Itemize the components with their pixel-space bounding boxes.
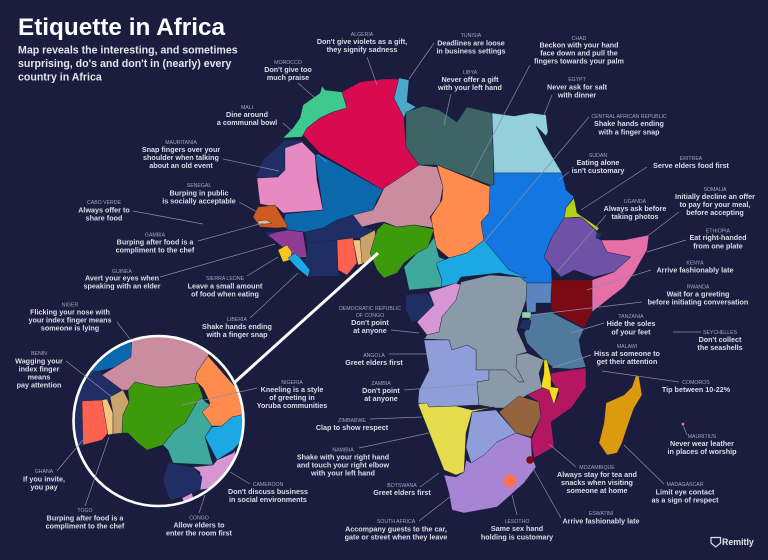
label: Benin: Wagging your: [15, 356, 63, 366]
label: Eswatini: [562, 511, 640, 526]
label: Benin: [15, 351, 63, 390]
label: Tunisia: in business settings: [436, 46, 506, 56]
title: Etiquette in Africa: [18, 14, 225, 41]
label: Togo: [46, 508, 125, 530]
country: Chad: [431, 165, 491, 258]
label: Mozambique: [557, 465, 637, 495]
label: Ghana: If you invite,: [23, 474, 65, 484]
label: Niger: your index finger means: [28, 316, 112, 324]
label: Seychelles: Don't collect: [699, 335, 742, 344]
inset: Congo: [193, 450, 235, 490]
label: Kenya: Arrive fashionably late: [656, 266, 734, 274]
country: Libya: [406, 106, 494, 185]
label: Mali: [217, 105, 277, 127]
label: Somalia: before accepting: [686, 208, 744, 217]
label: Liberia: LIBERIA: [227, 317, 247, 323]
inset: Togo: [102, 399, 113, 435]
label: Rwanda: Wait for a greeting: [667, 290, 729, 298]
label: Morocco: MOROCCO: [274, 60, 302, 66]
label: Ethiopia: [689, 228, 747, 250]
label: Kenya: [656, 260, 734, 274]
inset: Niger: [102, 335, 215, 390]
country: Madagascar: [599, 375, 642, 455]
label: Chad: CHAD: [572, 36, 587, 42]
label: Madagascar: as a sign of respect: [651, 496, 719, 504]
label: Namibia: with your left hand: [310, 468, 375, 478]
label: Nigeria: [257, 380, 327, 410]
country: Egypt: [492, 113, 562, 173]
label: Madagascar: Limit eye contact: [656, 488, 715, 496]
label: Angola: Greet elders first: [345, 358, 403, 367]
label: Eritrea: [653, 156, 730, 170]
country: Guinea: [268, 230, 307, 258]
label: Chad: fingers towards your palm: [534, 56, 624, 66]
label: Guinea: Avert your eyes when: [85, 274, 159, 282]
label: Democratic Republic of Congo: [339, 306, 401, 335]
label: Comoros: [662, 380, 731, 394]
label: Egypt: [547, 77, 608, 100]
label: Mauritania: [142, 140, 220, 170]
label: Tunisia: Deadlines are loose: [437, 38, 505, 48]
label: Nigeria: NIGERIA: [281, 380, 303, 386]
label: Central African Republic: CENTRAL AFRICAN REPUBLIC: [591, 114, 667, 120]
inset: Benin: [110, 390, 129, 434]
label: Angola: ANGOLA: [363, 353, 385, 359]
label: Mauritius: MAURITIUS: [688, 434, 717, 440]
label: Central African Republic: Shake hands ending: [594, 119, 664, 128]
label: Algeria: ALGERIA: [351, 32, 374, 38]
country: Burundi: [519, 320, 531, 330]
label: Botswana: Greet elders first: [373, 488, 431, 497]
leader lines: [57, 43, 701, 521]
country: Ethiopia: [544, 217, 631, 277]
label: Mauritius: Never wear leather: [670, 439, 734, 448]
label: Seychelles: SEYCHELLES: [703, 330, 738, 336]
country: Togo: [353, 240, 365, 265]
country: Zimbabwe: [499, 396, 541, 437]
label: Comoros: Tip between 10-22%: [662, 385, 731, 394]
label: Libya: with your left hand: [437, 83, 502, 92]
label: Zimbabwe: Clap to show respect: [316, 423, 389, 432]
label: Chad: face down and pull the: [540, 48, 618, 58]
country: Lake Victoria: [536, 303, 551, 320]
label: Eritrea: ERITREA: [680, 156, 703, 162]
label: Mauritius: [667, 434, 737, 456]
label: Morocco: [264, 60, 312, 82]
subtitle: [18, 44, 238, 84]
label: Somalia: [675, 187, 755, 217]
country: Namibia: [418, 403, 494, 475]
label: Gambia: compliment to the chef: [116, 246, 195, 254]
label: Madagascar: MADAGASCAR: [667, 482, 704, 488]
country: Cameroon: [404, 237, 446, 290]
label: Tanzania: of your feet: [611, 328, 651, 336]
label: Seychelles: [697, 330, 743, 352]
country: Eswatini: [526, 456, 534, 464]
label: Cabo Verde: Always offer to: [78, 206, 130, 214]
label: Togo: compliment to the chef: [46, 522, 125, 530]
label: Tanzania: Hide the soles: [607, 319, 655, 328]
label: Democratic Republic of Congo: Don't point: [351, 318, 389, 327]
label: Senegal: Burping in public: [169, 188, 229, 198]
label: Egypt: EGYPT: [568, 77, 587, 83]
label: Ethiopia: from one plate: [693, 242, 743, 250]
label: Congo: CONGO: [189, 516, 209, 522]
label: Ethiopia: Eat right-handed: [689, 233, 747, 242]
label: Nigeria: Yoruba communities: [257, 401, 327, 410]
country: Ivory Coast: [302, 240, 340, 277]
label: Togo: Burping after food is a: [47, 514, 124, 522]
label: Gambia: [116, 232, 195, 254]
label: South Africa: Accompany guests to the car,: [345, 524, 447, 534]
label: Tanzania: [607, 314, 655, 336]
country: Eritrea: [564, 198, 599, 231]
label: Botswana: BOTSWANA: [387, 483, 417, 489]
label: Guinea: [83, 269, 161, 290]
label: Liberia: with a finger snap: [205, 330, 268, 339]
label: Niger: NIGER: [62, 302, 78, 308]
label: Congo: Allow elders to: [173, 520, 225, 530]
country: Malawi: [541, 360, 559, 405]
country: Tanzania: [524, 312, 586, 369]
inset: Ghana: [82, 400, 108, 445]
country: Liberia: [288, 253, 310, 277]
label: Mauritania: MAURITANIA: [165, 140, 197, 146]
label: Kenya: KENYA: [686, 260, 704, 266]
label: Malawi: MALAWI: [617, 344, 637, 350]
subtitle: country in Africa: [18, 72, 102, 84]
label: Zambia: [362, 381, 400, 403]
inset: Gabon: [163, 463, 202, 500]
label: Gambia: Burping after food is a: [117, 238, 194, 246]
label: Algeria: they signify sadness: [327, 45, 397, 54]
country: Morocco: [283, 86, 347, 138]
label: Guinea: GUINEA: [112, 269, 132, 275]
country: Tunisia: [394, 78, 416, 118]
label: Democratic Republic of Congo: DEMOCRATIC REPUBLIC: [339, 306, 401, 312]
label: Senegal: [162, 183, 236, 206]
country: Senegal: [253, 205, 288, 228]
label: Zambia: Don't point: [362, 386, 400, 395]
label: Nigeria: Kneeling is a style: [261, 385, 323, 394]
label: Somalia: Initially decline an offer: [675, 192, 755, 201]
inset: Mali: [91, 342, 132, 372]
label: Egypt: with dinner: [557, 90, 596, 100]
label: Tunisia: [436, 33, 506, 56]
label: Chad: [534, 36, 624, 66]
label: Malawi: Hiss at someone to: [594, 349, 661, 358]
label: Somalia: to pay for your meal,: [680, 200, 750, 209]
label: Cameroon: CAMEROON: [253, 482, 284, 488]
label: Sudan: Eating alone: [577, 158, 619, 167]
label: Madagascar: [651, 482, 719, 504]
label: Libya: Never offer a gift: [441, 75, 499, 84]
label: Ghana: you pay: [30, 482, 58, 492]
country: Nigeria: [370, 223, 434, 278]
label: Zambia: ZAMBIA: [371, 381, 391, 387]
label: Senegal: is socially acceptable: [162, 196, 236, 206]
label: Sudan: SUDAN: [589, 153, 607, 159]
country: Burkina Faso: [305, 215, 375, 245]
label: Chad: Beckon with your hand: [539, 40, 619, 50]
label: Benin: BENIN: [31, 351, 47, 357]
label: Mauritius: in places of worship: [667, 447, 737, 456]
label: Libya: [437, 70, 502, 92]
label: Namibia: [297, 448, 390, 478]
country: Democratic Republic of Congo: [424, 275, 527, 382]
label: Lesotho: Same sex hand: [491, 524, 543, 533]
country: Sudan and South Sudan: [481, 173, 574, 283]
label: Morocco: much praise: [267, 73, 309, 82]
country: Mauritius: [682, 423, 684, 425]
label: South Africa: gate or street when they leave: [345, 532, 447, 542]
label: Uganda: taking photos: [611, 212, 659, 221]
label: Congo: [166, 516, 233, 538]
label: Benin: pay attention: [17, 380, 61, 390]
label: Eswatini: Arrive fashionably late: [562, 516, 640, 526]
label: Mauritania: Snap fingers over your: [142, 145, 220, 154]
label: Niger: Flicking your nose with: [30, 308, 110, 316]
label: Congo: enter the room first: [166, 528, 233, 538]
label: Lesotho: holding is customary: [481, 532, 553, 542]
country: Central African Republic: [436, 240, 527, 287]
label: Togo: TOGO: [77, 508, 93, 514]
country: Djibouti: [594, 232, 602, 238]
label: Angola: [345, 353, 403, 367]
label: Namibia: NAMIBIA: [332, 448, 354, 454]
label: Uganda: UGANDA: [624, 199, 647, 205]
label: Sierra Leone: [188, 276, 263, 298]
label: Nigeria: of greeting in: [269, 393, 315, 402]
label: Cameroon: [228, 482, 308, 504]
label: Namibia: and touch your right elbow: [297, 460, 390, 470]
inset: Central African Republic: [205, 414, 245, 460]
label: Sierra Leone: of food when eating: [191, 290, 259, 298]
country: Sierra Leone: [278, 245, 292, 262]
country: Congo: [417, 283, 461, 335]
country: Gambia: [258, 220, 272, 224]
label: Sudan: isn't customary: [572, 166, 624, 175]
label: Somalia: SOMALIA: [703, 187, 727, 193]
label: South Africa: [345, 519, 447, 542]
label: Tunisia: TUNISIA: [461, 33, 482, 39]
label: Lesotho: LESOTHO: [505, 519, 529, 525]
label: Senegal: SENEGAL: [187, 183, 211, 189]
label: Eswatini: ESWATINI: [589, 511, 613, 517]
label: Mozambique: Always stay for tea and: [557, 470, 637, 479]
label: Zimbabwe: ZIMBABWE: [338, 418, 366, 424]
inset: Chad: [195, 356, 245, 426]
label: Mozambique: MOZAMBIQUE: [579, 465, 615, 471]
label: Cameroon: in social environments: [229, 495, 307, 504]
country: Lesotho: [504, 474, 516, 488]
label: Seychelles: the seashells: [697, 343, 743, 352]
label: Mali: MALI: [241, 105, 253, 111]
country: Mali: [283, 154, 383, 232]
inset: Cameroon: [163, 398, 213, 465]
country: Guinea-Bissau: [266, 231, 276, 238]
country: Uganda: [526, 283, 556, 313]
label: Liberia: [202, 317, 272, 339]
label: Mali: a communal bowl: [217, 118, 277, 127]
country: Mozambique: [527, 368, 586, 458]
country: South Africa: [444, 433, 536, 513]
label: Cabo Verde: share food: [86, 214, 122, 222]
label: Botswana: [373, 483, 431, 497]
country: Mauritania: [257, 142, 323, 213]
country: Zambia: [477, 353, 544, 408]
label: Sierra Leone: SIERRA LEONE: [206, 276, 245, 282]
label: Benin: index finger: [19, 364, 60, 374]
label: Central African Republic: [591, 114, 667, 136]
inset: Nigeria: [122, 382, 203, 450]
label: Sudan: [572, 153, 624, 175]
zoom inset circle: [70, 335, 245, 506]
label: Zimbabwe: [316, 418, 389, 432]
label: Democratic Republic of Congo: OF CONGO: [356, 313, 384, 319]
label: Rwanda: before initiating conversation: [648, 298, 748, 306]
label: Cabo Verde: CABO VERDE: [87, 200, 122, 206]
label: Libya: LIBYA: [463, 70, 478, 76]
label: Uganda: [604, 199, 666, 221]
label: Niger: someone is lying: [41, 324, 99, 332]
country: Niger: [353, 165, 443, 228]
label: Cabo Verde: [78, 200, 130, 222]
country: Rwanda: [522, 312, 531, 318]
label: Zambia: at anyone: [364, 394, 398, 403]
label: Gambia: GAMBIA: [145, 232, 166, 238]
zoom connector line: [235, 253, 378, 382]
label: Eritrea: Serve elders food first: [653, 161, 730, 170]
label: Liberia: Shake hands ending: [202, 322, 272, 331]
label: Guinea: speaking with an elder: [83, 282, 161, 290]
subtitle: Map reveals the interesting, and sometimes: [18, 44, 238, 56]
label: Namibia: Shake with your right hand: [297, 452, 389, 462]
country: Ghana: [337, 238, 357, 275]
label: South Africa: SOUTH AFRICA: [377, 519, 416, 525]
label: Mozambique: someone at home: [566, 486, 628, 495]
label: Cameroon: Don't discuss business: [228, 487, 308, 496]
label: Niger: [28, 302, 112, 332]
country: Western Sahara: [256, 140, 303, 177]
label: Central African Republic: with a finger snap: [597, 128, 660, 136]
label: Malawi: get their attention: [597, 357, 657, 366]
country: Somalia: [592, 235, 649, 312]
country: Gabon: [406, 293, 436, 322]
label: Democratic Republic of Congo: at anyone: [353, 326, 387, 335]
inset: Equatorial islet: [182, 493, 193, 501]
country: Algeria: [303, 79, 419, 190]
label: Mali: Dine around: [226, 110, 268, 119]
label: Lesotho: [481, 519, 553, 542]
map of Africa: [253, 78, 684, 513]
label: Uganda: Always ask before: [604, 204, 666, 213]
label: Egypt: Never ask for salt: [547, 82, 608, 92]
label: Ethiopia: ETHIOPIA: [706, 228, 731, 234]
label: Comoros: COMOROS: [682, 380, 710, 386]
label: Rwanda: RWANDA: [687, 284, 710, 290]
label: Sierra Leone: Leave a small amount: [188, 282, 263, 290]
country: Angola: [418, 340, 489, 407]
label: Algeria: [317, 32, 407, 54]
label: Ghana: GHANA: [35, 469, 54, 475]
label: Mozambique: snacks when visiting: [561, 478, 633, 487]
label: Rwanda: [648, 284, 748, 306]
country: Benin: [360, 230, 377, 263]
inset: Burkina Faso and Ivory Coast: [74, 370, 122, 446]
label: Tanzania: TANZANIA: [618, 314, 644, 320]
country: Botswana: [466, 410, 516, 463]
label: Algeria: Don't give violets as a gift,: [317, 37, 407, 46]
label: Benin: means: [28, 372, 50, 382]
Remitly logo: Remitly: [722, 537, 754, 547]
label: Ghana: [23, 469, 65, 492]
country: Kenya: [551, 280, 592, 328]
label: Malawi: [594, 344, 661, 366]
label: Mauritania: about an old event: [149, 161, 213, 170]
label: Mauritania: shoulder when talking: [143, 153, 219, 162]
subtitle: surprising, do's and don't in (nearly) every: [18, 58, 232, 70]
label: Morocco: Don't give too: [264, 65, 312, 74]
